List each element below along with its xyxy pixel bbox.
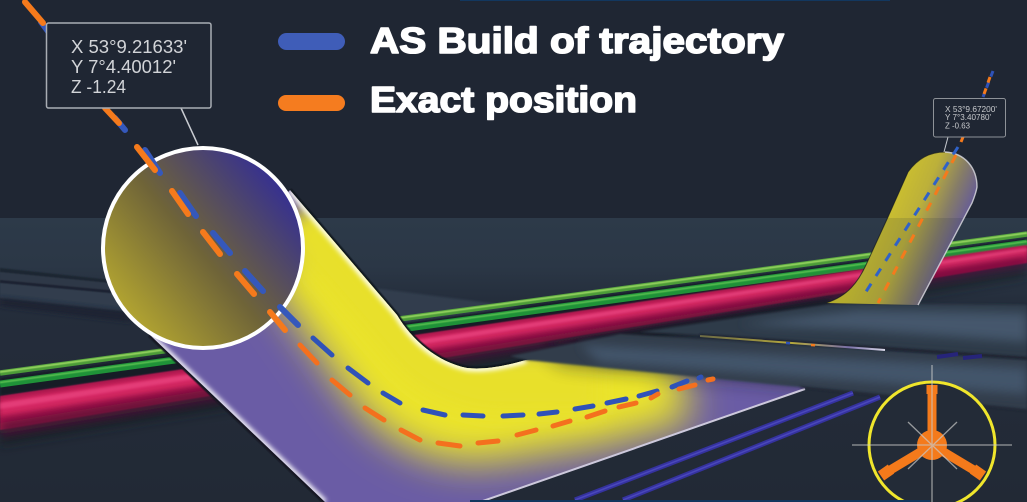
callout connector xyxy=(181,108,198,145)
coordinates callout: Z -1.24 xyxy=(71,76,126,97)
cross-section disc xyxy=(103,148,303,348)
legend: exact position xyxy=(278,79,637,120)
bottom edge strip xyxy=(470,500,930,502)
left dark pipes xyxy=(0,268,130,322)
coordinates callout: Y 7°4.40012' xyxy=(71,56,176,77)
ground band xyxy=(0,218,1027,502)
green pipes xyxy=(0,233,1027,396)
pipe behind tube xyxy=(373,288,560,340)
coordinates callout xyxy=(46,23,211,108)
small callout connector xyxy=(944,137,948,152)
dark pipe lower right xyxy=(510,334,1027,410)
blue ground lines xyxy=(575,354,982,500)
coordinates callout: X 53°9.21633' xyxy=(71,36,187,57)
legend: exact position: Exact position xyxy=(370,79,637,120)
shadow under red pipe xyxy=(540,298,830,345)
small coordinates callout: Z -0.63 xyxy=(945,122,971,130)
small coordinates callout xyxy=(934,98,1006,137)
big tube dashes: exact position (orange) xyxy=(300,345,713,446)
dark pipe upper right xyxy=(640,304,1027,358)
big tube dashes: as-built (blue) xyxy=(313,338,701,416)
small coordinates callout: X 53°9.67200' xyxy=(945,105,997,114)
top edge strip xyxy=(460,0,890,1)
small far tube xyxy=(826,151,978,306)
yellow sliver xyxy=(700,336,885,350)
dashes above and through the disc xyxy=(25,2,298,330)
small coordinates callout: Y 7°3.40780' xyxy=(945,113,991,122)
big tube xyxy=(140,185,840,502)
compass icon xyxy=(852,365,1012,502)
legend: as built: AS Build of trajectory xyxy=(370,20,784,61)
small tube dashes xyxy=(862,71,993,303)
red pipe xyxy=(0,245,1027,446)
